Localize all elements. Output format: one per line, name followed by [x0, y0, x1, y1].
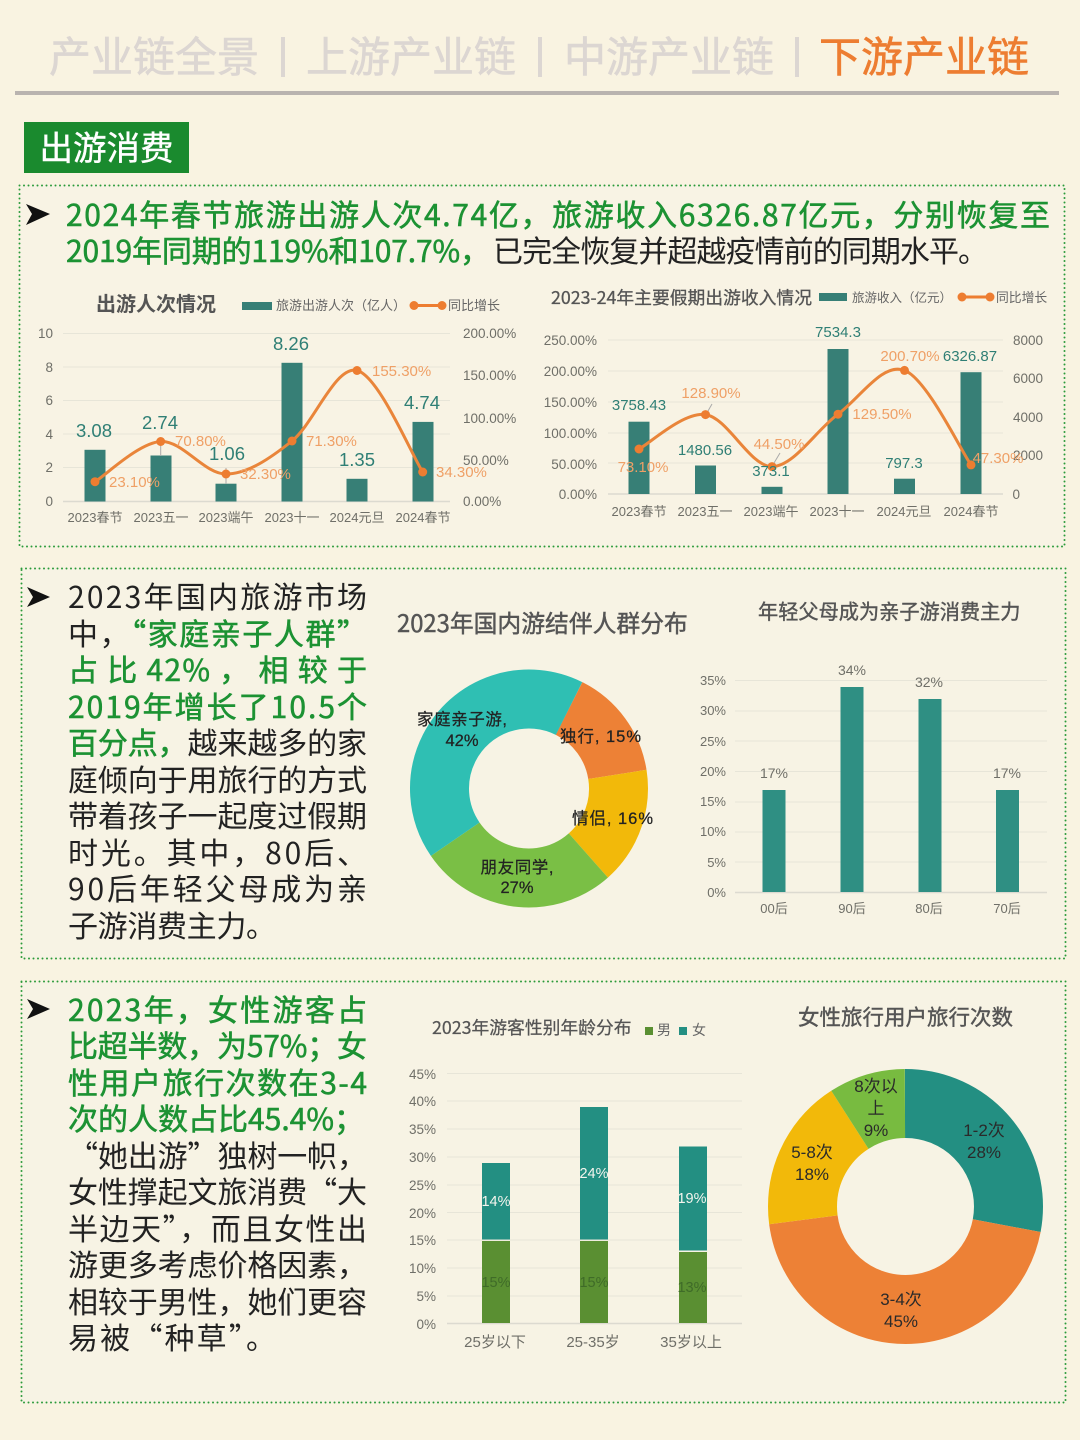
growth labels: 155.30% — [372, 363, 431, 380]
left axis: 10 — [38, 326, 53, 341]
right axis — [1012, 333, 1043, 502]
value labels: 4.74 — [404, 392, 440, 413]
stacked bar chart: gender and age: 15% — [481, 1275, 511, 1291]
female text block: 女性撑起文旅消费“大 — [68, 1168, 367, 1212]
bar chart: young parents: 30% — [700, 703, 726, 718]
chart legend: 女 — [692, 1022, 706, 1038]
value labels — [76, 333, 440, 470]
left axis: 8 — [45, 360, 53, 375]
donut chart: trip count: 9% — [864, 1121, 888, 1140]
chart legend — [819, 290, 1047, 305]
panel: family travel — [22, 568, 1066, 958]
right axis: 150.00% — [463, 368, 516, 383]
stacked bar chart: gender and age: 35岁以上 — [660, 1334, 722, 1351]
category labels: 2023五一 — [678, 504, 732, 519]
right axis: 6000 — [1013, 371, 1043, 386]
category labels: 2023十一 — [265, 510, 319, 525]
right axis: 0 — [1012, 487, 1020, 502]
category labels: 2023春节 — [612, 504, 666, 519]
bar chart: young parents: 32% — [915, 674, 943, 690]
right axis: 8000 — [1013, 333, 1043, 348]
stacked bar chart: gender and age: 5% — [416, 1289, 436, 1304]
value labels: 6326.87 — [943, 348, 997, 365]
family text block: 带着孩子一起度过假期 — [68, 792, 367, 836]
donut chart: trip count: 上 — [868, 1099, 884, 1118]
donut chart: companions: 情侣, 16% — [572, 809, 653, 828]
family text block: 中，“家庭亲子人群” — [68, 610, 367, 654]
left axis: 0.00% — [559, 487, 597, 502]
panel: female travellers — [22, 982, 1066, 1402]
icon: arrow bullet — [27, 999, 50, 1019]
donut chart: companions: 朋友同学, — [480, 858, 554, 877]
category labels — [612, 504, 998, 519]
chart legend — [242, 298, 500, 313]
bar chart: young parents: 20% — [700, 764, 726, 779]
summary text: 2019年同期的119%和107.7%， — [66, 227, 490, 271]
bar chart: young parents: 35% — [700, 673, 726, 688]
line series — [90, 366, 427, 486]
growth labels: 32.30% — [240, 466, 291, 483]
left axis: 150.00% — [544, 395, 597, 410]
header navigation: 下游产业链 — [819, 24, 1029, 85]
value labels: 7534.3 — [815, 324, 861, 341]
bar chart: young parents: 10% — [700, 824, 726, 839]
icon: arrow bullet — [27, 587, 50, 607]
family text block: 2019年增长了10.5个 — [68, 683, 367, 727]
right axis: 100.00% — [463, 411, 516, 426]
category labels: 2023十一 — [810, 504, 864, 519]
chart: tourism income — [544, 284, 1047, 519]
female text block: 性用户旅行次数在3-4 — [68, 1059, 367, 1103]
stacked bar chart: gender and age: 25岁以下 — [464, 1334, 526, 1351]
stacked bar chart: gender and age: 0% — [416, 1317, 436, 1332]
bar chart: young parents: 00后 — [760, 901, 788, 916]
donut chart: trip count: 8次以 — [854, 1077, 898, 1096]
stacked bar chart: gender and age: 15% — [409, 1233, 436, 1248]
female text block: “她出游”独树一帜， — [68, 1132, 367, 1176]
summary text: 2024年春节旅游出游人次4.74亿，旅游收入6326.87亿元，分别恢复至 — [66, 191, 1050, 235]
chart title: 2023-24年主要假期出游收入情况 — [551, 284, 812, 310]
stacked bar chart: gender and age — [409, 1014, 742, 1351]
donut chart: companions — [409, 668, 653, 909]
value labels: 373.1 — [752, 463, 790, 480]
header navigation — [15, 24, 1059, 95]
family text block — [68, 573, 367, 946]
bar chart: young parents: 70后 — [993, 901, 1021, 916]
bar chart: young parents: 5% — [707, 855, 726, 870]
value labels: 797.3 — [885, 455, 923, 472]
growth labels: 34.30% — [436, 464, 487, 481]
bar chart: young parents: 15% — [700, 794, 726, 809]
donut chart: trip count: 18% — [795, 1165, 829, 1184]
stacked bar chart: gender and age: 13% — [677, 1280, 707, 1296]
category labels: 2024春节 — [396, 510, 450, 525]
growth labels — [618, 348, 1023, 476]
bars — [84, 363, 434, 502]
bar chart: young parents: 17% — [993, 765, 1021, 781]
value labels: 1.35 — [339, 449, 375, 470]
female text block: 次的人数占比45.4%； — [68, 1095, 364, 1139]
value labels: 3.08 — [76, 420, 112, 441]
category labels: 2023端午 — [744, 504, 798, 519]
chart title: 出游人次情况 — [96, 292, 216, 316]
family text block: 时光。其中，80后、 — [68, 829, 367, 873]
growth labels: 128.90% — [681, 385, 741, 402]
left axis — [544, 333, 597, 502]
left axis — [38, 326, 53, 509]
category labels: 2024元旦 — [877, 504, 931, 519]
category labels — [68, 510, 450, 525]
value labels: 8.26 — [273, 333, 309, 354]
donut chart: companions: 42% — [445, 732, 479, 750]
growth labels: 23.10% — [109, 474, 160, 491]
left axis: 6 — [45, 393, 53, 408]
donut chart: trip count — [791, 1077, 1008, 1331]
left axis: 50.00% — [551, 457, 597, 472]
stacked bar chart: gender and age: 10% — [409, 1261, 436, 1276]
bar chart: young parents: 90后 — [838, 901, 866, 916]
chart legend: 同比增长 — [996, 290, 1047, 305]
category labels: 2023端午 — [199, 510, 253, 525]
value labels — [612, 324, 997, 480]
right axis: 2000 — [1013, 448, 1043, 463]
header navigation: 中游产业链 — [564, 24, 774, 85]
stacked bar chart: gender and age: 19% — [677, 1191, 707, 1207]
stacked bar chart: gender and age: 24% — [579, 1166, 609, 1182]
category labels: 2024春节 — [944, 504, 998, 519]
donut chart: trip count: 5-8次 — [791, 1143, 833, 1162]
category labels: 2023五一 — [134, 510, 188, 525]
bars — [628, 349, 982, 494]
female text block: 相较于男性，她们更容 — [68, 1278, 367, 1322]
growth labels: 71.30% — [306, 433, 357, 450]
family text block: 2023年国内旅游市场 — [68, 573, 367, 617]
stacked bar chart: gender and age: 15% — [579, 1275, 609, 1291]
bar chart: young parents: 0% — [707, 885, 726, 900]
chart legend: 男 — [657, 1022, 671, 1038]
growth labels: 47.30% — [973, 450, 1023, 467]
category labels: 2023春节 — [68, 510, 122, 525]
value labels: 3758.43 — [612, 397, 666, 414]
left axis: 100.00% — [544, 426, 597, 441]
right axis: 50.00% — [463, 453, 509, 468]
chart title: female trip count: 女性旅行用户旅行次数 — [798, 1001, 1013, 1032]
family text block: 百分点，越来越多的家 — [68, 719, 367, 763]
header navigation: 上游产业链 — [306, 24, 516, 85]
bar chart: young parents: 17% — [760, 765, 788, 781]
line series — [634, 366, 976, 471]
female text block: 易被“种草”。 — [68, 1314, 276, 1358]
chart legend: 同比增长 — [448, 298, 500, 313]
chart legend: 旅游出游人次（亿人） — [276, 298, 406, 313]
left axis: 250.00% — [544, 333, 597, 348]
summary text: 已完全恢复并超越疫情前的同期水平。 — [493, 227, 988, 271]
chart legend — [645, 1022, 706, 1038]
donut chart: trip count: 3-4次 — [880, 1290, 922, 1309]
bar chart: young parents: 80后 — [915, 901, 943, 916]
bar chart: young parents — [700, 596, 1047, 916]
value labels: 2.74 — [142, 412, 178, 433]
left axis: 200.00% — [544, 364, 597, 379]
section tag: 出游消费: 出游消费 — [40, 121, 174, 170]
growth labels: 200.70% — [880, 348, 940, 365]
bar chart: young parents: 34% — [838, 662, 866, 678]
donut chart: companions: 独行, 15% — [560, 727, 641, 746]
chart title: 2023年游客性别年龄分布 — [432, 1014, 632, 1040]
right axis: 0.00% — [463, 494, 501, 509]
value labels: 1.06 — [209, 443, 245, 464]
family text block: 占 比 42% ， 相 较 于 — [68, 646, 367, 690]
bar chart: young parents: 25% — [700, 734, 726, 749]
female text block: 2023年，女性游客占 — [68, 986, 367, 1030]
growth labels: 73.10% — [618, 459, 668, 476]
left axis: 2 — [45, 460, 53, 475]
stacked bar chart: gender and age: 45% — [409, 1067, 436, 1082]
stacked bar chart: gender and age: 40% — [409, 1094, 436, 1109]
summary text — [66, 191, 1050, 271]
family text block: 子游消费主力。 — [68, 902, 276, 946]
value labels: 1480.56 — [678, 442, 732, 459]
female text block: 比超半数，为57%；女 — [68, 1022, 367, 1066]
stacked bar chart: gender and age: 25-35岁 — [566, 1334, 620, 1351]
donut chart: trip count: 28% — [967, 1143, 1001, 1162]
female text block: 半边天”，而且女性出 — [68, 1205, 367, 1249]
growth labels: 70.80% — [175, 433, 226, 450]
chart title: companion distribution: 2023年国内游结伴人群分布 — [397, 604, 688, 639]
female text block: 游更多考虑价格因素， — [68, 1241, 367, 1285]
donut chart: trip count: 45% — [884, 1312, 918, 1331]
stacked bar chart: gender and age: 20% — [409, 1206, 436, 1221]
right axis — [463, 326, 516, 509]
header navigation: 产业链全景 — [49, 24, 259, 85]
category labels: 2024元旦 — [330, 510, 384, 525]
left axis: 4 — [45, 427, 53, 442]
growth labels: 129.50% — [852, 406, 912, 423]
chart legend: 旅游收入（亿元） — [852, 290, 952, 305]
female text block — [68, 986, 367, 1358]
panel: tourism overview — [20, 186, 1064, 546]
right axis: 4000 — [1013, 410, 1043, 425]
icon: arrow bullet — [26, 204, 50, 225]
chart title: 年轻父母成为亲子游消费主力 — [758, 596, 1020, 625]
donut chart: companions: 家庭亲子游, — [417, 710, 507, 729]
chart: visitor trips — [38, 292, 516, 525]
stacked bar chart: gender and age: 30% — [409, 1150, 436, 1165]
donut chart: trip count: 1-2次 — [963, 1121, 1005, 1140]
growth labels: 44.50% — [754, 436, 804, 453]
stacked bar chart: gender and age: 25% — [409, 1178, 436, 1193]
left axis: 0 — [45, 494, 53, 509]
stacked bar chart: gender and age: 14% — [481, 1194, 511, 1210]
donut chart: companions: 27% — [500, 879, 534, 897]
family text block: 90后年轻父母成为亲 — [68, 865, 367, 909]
growth labels — [109, 363, 487, 491]
stacked bar chart: gender and age: 35% — [409, 1122, 436, 1137]
right axis: 200.00% — [463, 326, 516, 341]
family text block: 庭倾向于用旅行的方式 — [68, 756, 367, 800]
